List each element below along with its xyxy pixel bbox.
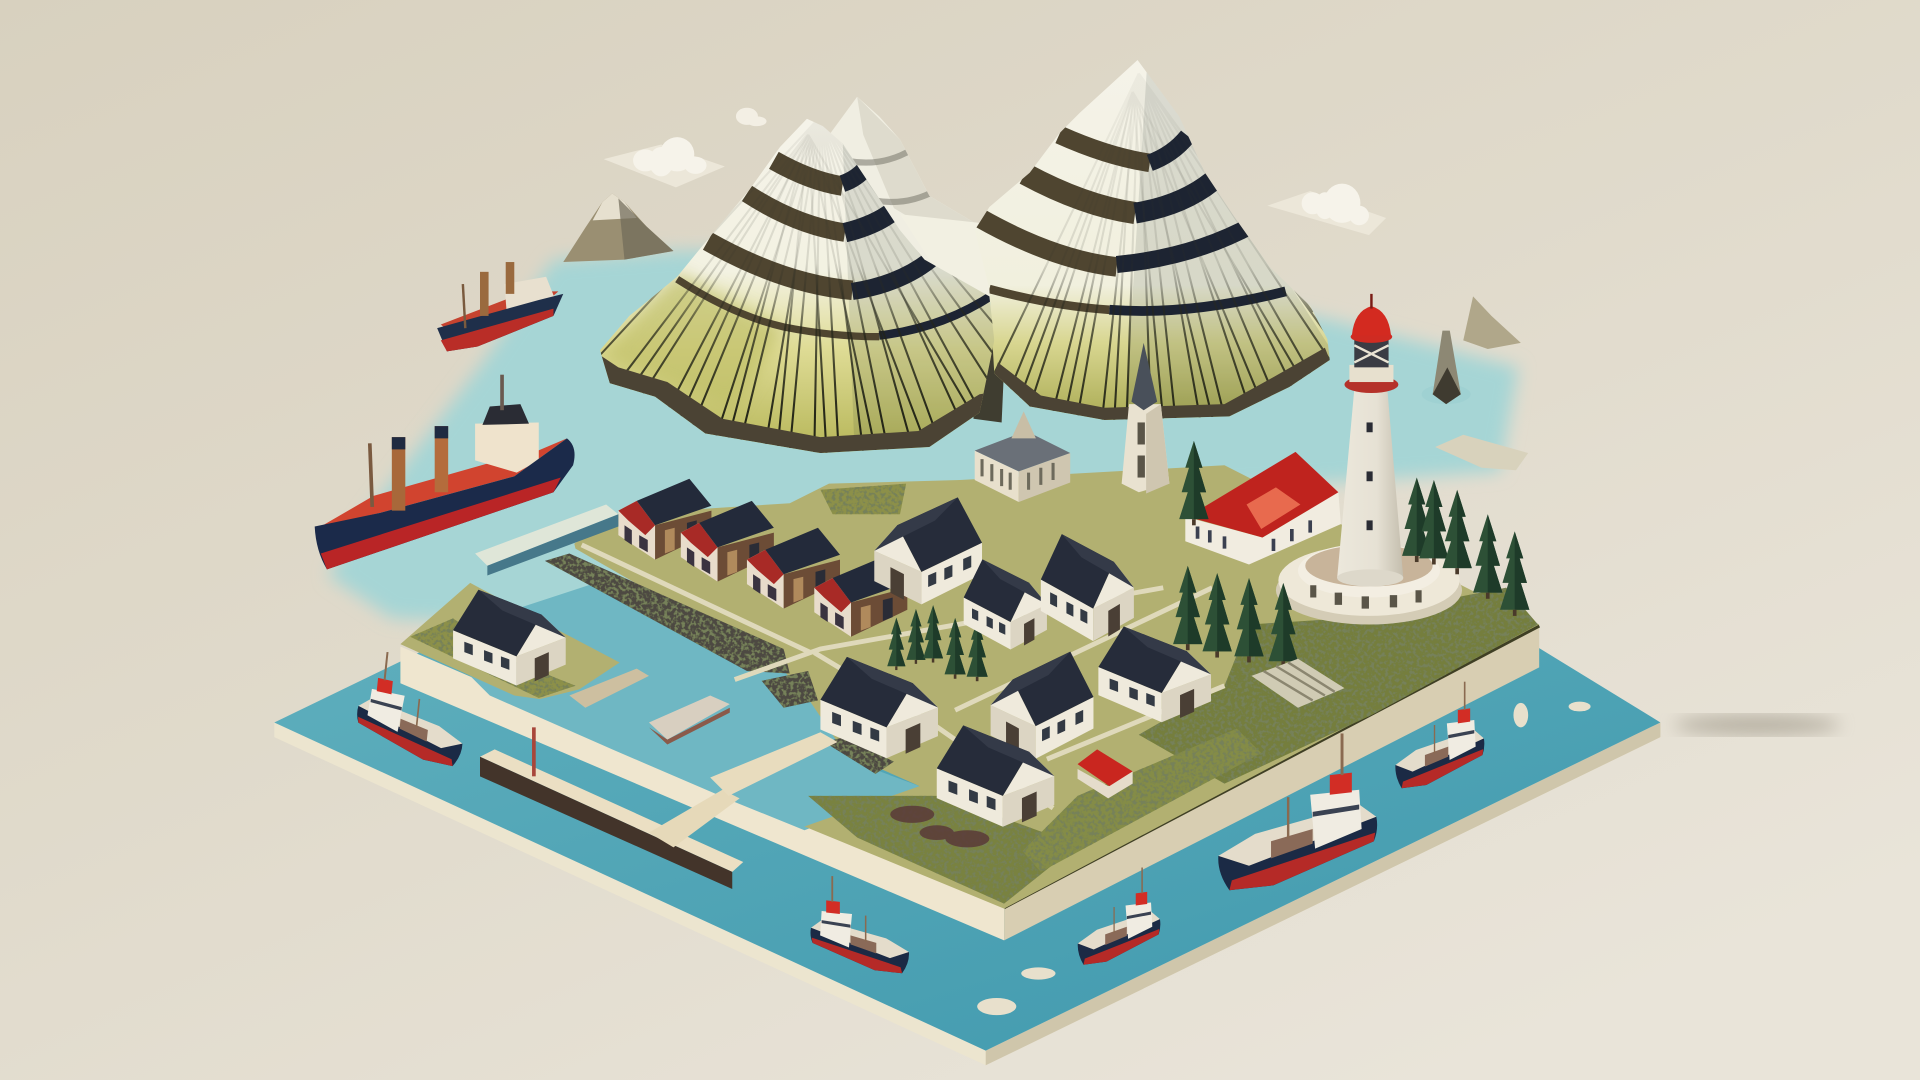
- left striped mountain: [600, 119, 994, 453]
- eastern woodland floor: [1139, 588, 1538, 784]
- moored barges: [1435, 435, 1528, 470]
- rock tower: [1422, 331, 1471, 404]
- olive western flank: [598, 272, 784, 410]
- church: [975, 411, 1070, 502]
- cleft between mountains: [973, 312, 1007, 422]
- lighthouse: [1337, 294, 1403, 587]
- land block front walls: [400, 624, 1539, 940]
- lighthouse grounds ring: [1276, 544, 1462, 624]
- pale water around the mountains: [328, 245, 1518, 624]
- small red shed: [1078, 749, 1133, 798]
- log pile: [1251, 659, 1344, 708]
- cloud right: [1267, 184, 1386, 235]
- left spit shrubs: [410, 618, 576, 698]
- village paths: [582, 545, 1224, 808]
- rocks by dock: [824, 737, 894, 774]
- small tree cluster: [887, 605, 988, 681]
- wooden dock over inlet: [710, 732, 838, 796]
- rock ribs: [600, 116, 994, 453]
- dark bands west face: [677, 160, 879, 337]
- south edge scrub: [1022, 729, 1261, 872]
- upper cargo ship: [437, 262, 563, 351]
- basalt cliff foot: [600, 355, 994, 453]
- parked cars garden: [890, 806, 989, 847]
- main island green: [574, 465, 1539, 909]
- land top: [400, 465, 1539, 909]
- footbridge on north shore: [475, 504, 618, 576]
- large steamship: [315, 375, 575, 569]
- church tower: [1122, 343, 1169, 493]
- rocky shoreline: [545, 553, 790, 673]
- cast shadow right of base: [1674, 715, 1840, 735]
- left spit green: [400, 583, 620, 699]
- white houses: [453, 497, 1211, 827]
- sea base plate: [274, 618, 1660, 1065]
- right face shading: [842, 144, 994, 435]
- cloud left: [604, 137, 725, 187]
- forest by lighthouse: [1173, 441, 1529, 667]
- small rocky islet: [563, 193, 673, 262]
- inlet water: [431, 576, 920, 830]
- red roof hall: [1185, 452, 1341, 564]
- northern scrub: [820, 484, 906, 514]
- moored launches in inlet: [569, 669, 730, 744]
- rock ribs: [994, 73, 1330, 421]
- cloud small: [736, 108, 767, 126]
- distant sea stack: [1463, 296, 1521, 349]
- far mountain peak: [830, 97, 973, 264]
- dark bands east face: [1109, 136, 1286, 311]
- dark bands east face: [842, 167, 994, 336]
- rocks south of road: [762, 671, 818, 708]
- row of red trimmed cabins: [618, 479, 907, 637]
- small boats: [353, 650, 1484, 973]
- dark bands west face: [980, 135, 1150, 310]
- harbour pier: [480, 727, 743, 889]
- basalt cliff foot: [994, 348, 1330, 420]
- right striped mountain: [976, 60, 1330, 420]
- buoys: [977, 702, 1591, 1015]
- right face shading: [1126, 72, 1330, 407]
- garden plots south: [808, 796, 1078, 904]
- saddle between mountains: [900, 214, 1002, 318]
